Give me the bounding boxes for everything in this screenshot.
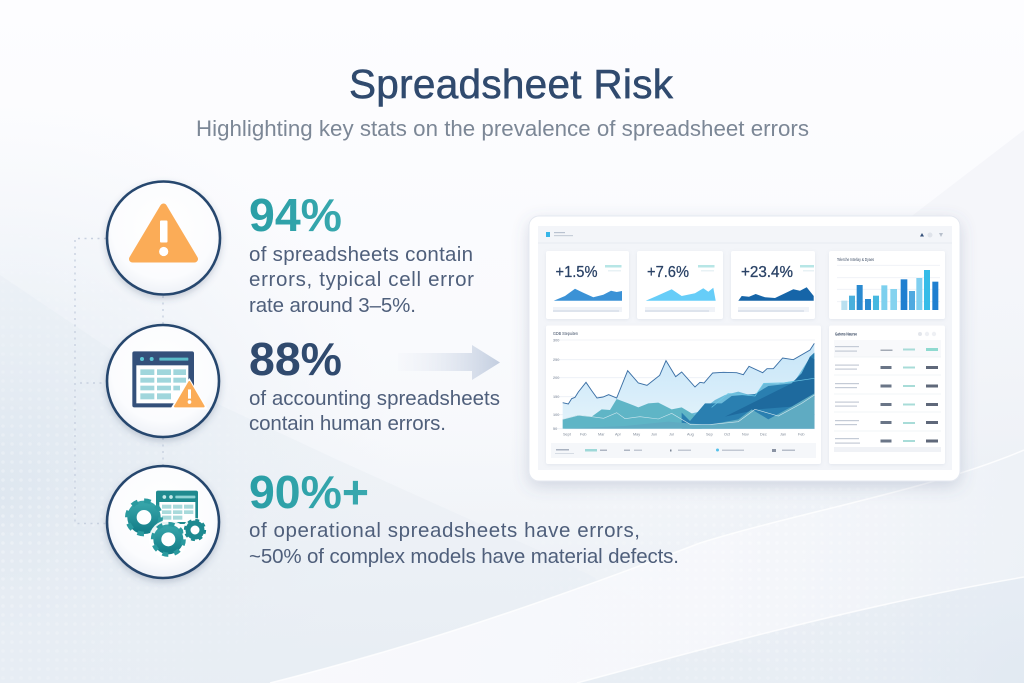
chart axis labels: Jun: [651, 432, 657, 436]
chart axis labels: 200: [553, 376, 559, 380]
title: Spreadsheet Risk: [349, 61, 674, 107]
chart legend bar: [551, 443, 816, 458]
chart axis labels: Sept: [563, 432, 572, 436]
stat: 94%: errors, typical cell error: [249, 268, 474, 291]
chart axis labels: Nov: [742, 432, 749, 436]
stat: 90%+: 90%+: [249, 466, 369, 518]
chart axis labels: Jan: [780, 432, 786, 436]
stacked area chart: [563, 343, 814, 429]
chart axis labels: Sep: [706, 432, 713, 436]
data table card: Gatens Naurse: [835, 332, 857, 336]
icon: spreadsheet with warning in circle: [107, 325, 219, 437]
chart axis labels: 300: [553, 338, 559, 342]
stat: 90%+: ~50% of complex models have material defects.: [249, 545, 679, 568]
chart axis labels: 50: [553, 427, 557, 431]
data table card: [829, 326, 945, 464]
stat: 94%: 94%: [249, 189, 342, 241]
chart axis labels: [553, 338, 805, 436]
stat: 90%+: [249, 466, 679, 568]
KPI card: +1.5%: [546, 251, 629, 319]
stat: 88%: of accounting spreadsheets: [249, 387, 500, 410]
bar chart card: Telerche Interlay & Dyaes: [837, 257, 874, 262]
KPI card: +23.4%: +23.4%: [741, 264, 793, 281]
chart axis labels: Oct: [724, 432, 731, 436]
subtitle: Highlighting key stats on the prevalence of spreadsheet errors: [196, 116, 809, 141]
stat: 88%: 88%: [249, 333, 342, 385]
area chart card: GDB Stepuiten: [553, 331, 578, 336]
chart axis labels: Jul: [669, 432, 674, 436]
KPI card: +7.6%: [637, 251, 723, 319]
dashboard mockup: [529, 216, 960, 481]
stat: 88%: contain human errors.: [249, 412, 446, 435]
chart axis labels: Feb: [580, 432, 587, 436]
chart axis labels: Feb: [798, 432, 805, 436]
chart axis labels: 100: [553, 413, 559, 417]
bar chart card: [829, 251, 945, 319]
stat: 94%: rate around 3–5%.: [249, 294, 416, 317]
area chart card: [546, 326, 821, 464]
dotted connectors: [75, 238, 163, 524]
stat: 88%: [249, 333, 500, 435]
chart axis labels: 250: [553, 358, 559, 362]
chart axis labels: Mar: [598, 432, 605, 436]
chart axis labels: Apr: [615, 432, 622, 436]
arrow: [398, 345, 500, 380]
KPI card: +1.5%: +1.5%: [556, 264, 598, 281]
chart axis labels: Dec: [760, 432, 767, 436]
KPI card: +7.6%: +7.6%: [647, 264, 689, 281]
chart axis labels: 150: [553, 395, 559, 399]
background: [0, 275, 1024, 683]
stat: 90%+: of operational spreadsheets have errors,: [249, 519, 640, 542]
icon: warning triangle in circle: [107, 182, 220, 294]
dashboard header: [546, 232, 943, 238]
stat: 94%: of spreadsheets contain: [249, 243, 473, 266]
chart axis labels: May: [633, 432, 640, 436]
KPI card: +23.4%: [731, 251, 815, 319]
stat: 94%: [249, 189, 474, 317]
icon: gears and spreadsheet in circle: [107, 466, 219, 578]
chart axis labels: Aug: [687, 432, 694, 436]
